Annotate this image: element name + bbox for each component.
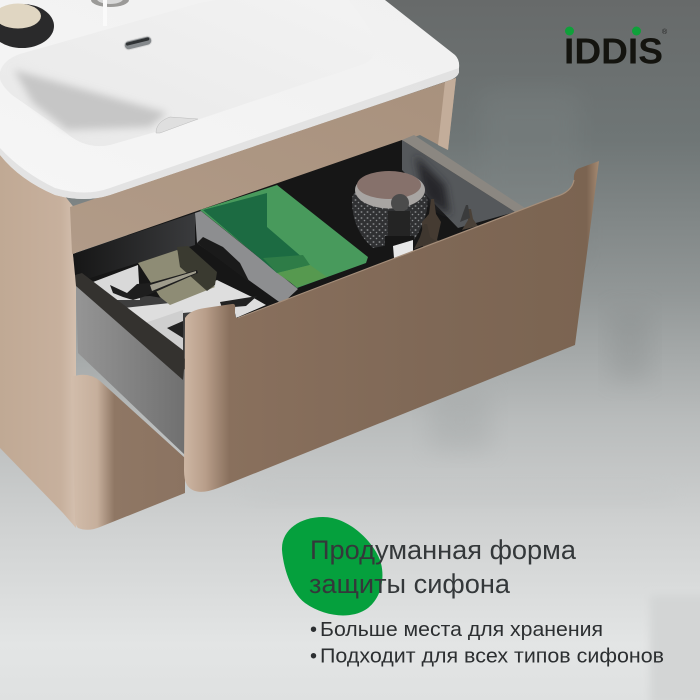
glass holder — [177, 246, 217, 291]
left outer side of drawer — [75, 273, 185, 455]
heading line two: защиты сифона — [309, 569, 510, 599]
bottle cap — [388, 211, 410, 238]
ceramic countertop — [0, 0, 459, 199]
soap bottle stripe — [150, 271, 196, 291]
drawer back wall shading — [73, 213, 195, 278]
green tray — [200, 185, 368, 288]
logo green dot one — [565, 26, 574, 36]
countertop front edge — [0, 68, 459, 199]
basin drain — [156, 117, 198, 133]
bullet list — [310, 619, 664, 668]
drawer front panel — [184, 161, 599, 492]
soap dish — [0, 4, 54, 48]
grey tray side — [195, 211, 298, 304]
drawer right inner wall — [402, 135, 525, 228]
logo IDDIS: IDDIS — [564, 30, 663, 72]
soap bottle — [110, 270, 198, 300]
jar lid top — [357, 171, 421, 199]
towel front — [123, 280, 266, 323]
bottle glass top — [391, 194, 409, 212]
open drawer interior — [73, 140, 525, 370]
jar lid rim — [355, 172, 425, 208]
faucet base — [91, 0, 129, 26]
small bottles — [422, 199, 448, 250]
sink basin — [0, 0, 376, 146]
registered mark: ® — [662, 28, 668, 36]
bullet one: Больше места для хранения — [320, 619, 603, 641]
upper rail of cabinet — [70, 78, 456, 254]
lower cabinet drawer front — [71, 375, 185, 530]
bullet one: • — [310, 619, 317, 641]
green blob — [282, 517, 382, 615]
magazine — [145, 310, 183, 362]
bullet two: • — [310, 646, 317, 668]
towel and items in left compartment — [93, 246, 266, 364]
black print — [220, 296, 257, 308]
jar and small bottles — [352, 171, 478, 260]
sponge — [138, 250, 215, 305]
jar body — [352, 190, 427, 248]
logo green dot two — [632, 26, 641, 36]
towel back — [93, 265, 140, 300]
basin overflow hole — [123, 35, 153, 51]
left cabinet side — [0, 150, 76, 528]
counter drawer highlight — [238, 180, 574, 318]
bullet two: Подходит для всех типов сифонов — [320, 646, 664, 668]
heading line one: Продуманная форма — [310, 535, 576, 565]
magazine dark print — [167, 321, 183, 338]
bottle label — [393, 240, 413, 258]
bottle body — [385, 236, 414, 260]
heading — [309, 535, 576, 599]
magazine dark band — [145, 325, 183, 364]
